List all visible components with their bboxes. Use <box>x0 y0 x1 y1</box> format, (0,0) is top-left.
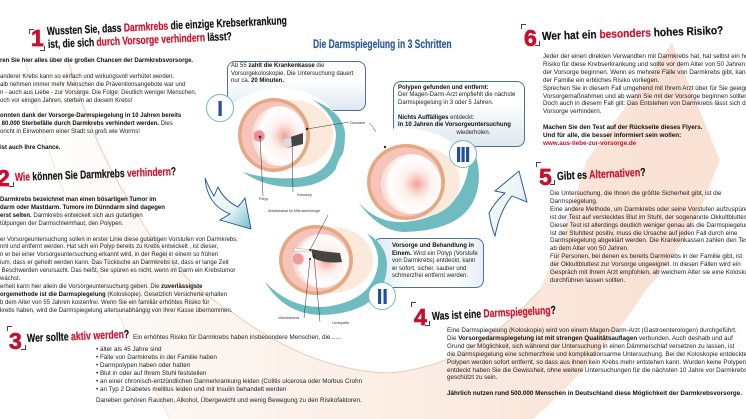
section 3 risk list: • älter als 45 Jahre sind • Fälle von Darmkrebs in der Familie haben • Darmpolypen haben oder hatten • Blut in oder auf Ihrem Stuhl feststellen • an einer chronisch-entzündlichen Darmerkrankung leiden (Colitis ulcerosa oder Morbus Crohn • an Typ 2 Diabetes mellitus leiden und mit Insulin behandelt werden Daneben gehören Rauchen, Alkohol, Übergewicht und wenig Bewegung zu den Risikofaktoren. <box>96 346 362 404</box>
illustration labels: Arbeitskanal für Mikrowerkzeuge <box>268 209 320 213</box>
center title: Die Darmspiegelung in 3 Schritten <box>313 39 452 51</box>
callout text: step I: Ab 55 zahlt die Krankenkasse die Vorsorgekoloskopie. Die Untersuchung dauert nur ca. 20 Minuten. <box>231 63 353 84</box>
heading text: Wer hat ein besonders hohes Risiko? <box>542 25 723 43</box>
section 6 heading <box>521 24 723 51</box>
number 1: 1 <box>31 25 44 51</box>
illustration labels: Dickdarm <box>350 121 365 125</box>
arrow: right blue <box>489 171 527 236</box>
section 1 heading <box>29 15 287 51</box>
illustration labels: Polyp <box>259 197 268 201</box>
number 3: 3 <box>9 328 22 354</box>
heading text: Wie können Sie Darmkrebs verhindern? <box>15 166 176 184</box>
heading text: Was ist eine Darmspiegelung? <box>432 305 556 323</box>
number 4: 4 <box>414 304 427 330</box>
section 5 heading <box>536 162 646 190</box>
heading line 1: Wussten Sie, dass Darmkrebs die einzige Krebserkrankung <box>47 15 287 38</box>
illustration labels: Koloskop <box>297 193 312 197</box>
illustration: step III <box>335 128 479 232</box>
number 5: 5 <box>539 164 552 190</box>
section 1 body: ren Sie hier alles über die großen Chancen der Darmkrebsvorsorge. anderer Krebs kann so einfach und wirkungsvoll verhütet werden. alb nehmen immer mehr Menschen die Präventionsangebote war und n - auch aus Liebe - zur Vorsorge. Die Folge: Deutlich weniger Menschen, och vor einigen Jahren, sterben an diesem Krebs! onnten dank der Vorsorge-Darmspiegelung in 10 Jahren bereits 80.000 Sterbefälle durch Darmkrebs verhindert werden. Dies oricht in Einwohnern einer Stadt so groß wie Worms! ist auch Ihre Chance. <box>0 58 196 151</box>
illustration labels: Videokamera <box>278 316 299 320</box>
section 3 intro: Ein erhöhtes Risiko für Darmkrebs haben insbesondere Menschen, die...... <box>133 334 341 341</box>
illustration labels <box>259 121 365 325</box>
callout text: step II: Vorsorge und Behandlung in Einem. Wird ein Polyp (Vorstufe von Darmkrebs) entdeckt, kann er sofort, sicher, sauber und schmerzfrei entfernt werden. <box>392 243 478 279</box>
heading text: Gibt es Alternativen? <box>557 167 646 183</box>
section 3 heading <box>7 326 129 354</box>
arrow: left blue <box>205 178 251 229</box>
callout text: step III: Polypen gefunden und entfernt: Der Magen-Darm-Arzt empfiehlt die nächste Darmspiegelung in 3 oder 5 Jahren. Nichts Auffälliges entdeckt: In 10 Jahren die Vorsorgeuntersuchung wiederholen. <box>398 84 515 136</box>
number 6: 6 <box>524 25 537 51</box>
section 4 body: Eine Darmspiegelung (Koloskopie) wird von einem Magen-Darm-Arzt (Gastroenterologen) durchgeführt. Die Vorsorgedarmspiegelung ist mit strengen Qualitätsauflagen verbunden. Auch deshalb und auf Grund der Möglichkeit, sich während der Untersuchung in einen Dämmerschlaf versetzen zu lassen, ist die Darmspiegelung eine schmerzfreie und komplikationsarme Untersuchung. Bei der Koloskopie entdeckte Polypen werden sofort entfernt, so dass aus ihnen kein Krebs mehr entstehen kann. Wurden keine Polypen entdeckt haben Sie die Gewissheit, ohne weitere Untersuchungen für die nächsten 10 Jahre vor Darmkrebs geschützt zu sein. Jährlich nutzen rund 500.000 Menschen in Deutschland diese Möglichkeit der Darmkrebsvorsorge. <box>447 327 746 397</box>
callout box: step III <box>393 81 525 147</box>
heading text: Wer sollte aktiv werden? <box>27 329 129 345</box>
callout box: step I <box>227 61 366 111</box>
illustration: step II <box>252 210 387 322</box>
callout box: step II <box>373 238 484 288</box>
section 4 heading <box>411 302 556 330</box>
section 2 heading <box>0 165 176 191</box>
illustration labels: Lichtquelle <box>332 321 349 325</box>
heading line 2: ist, die sich durch Vorsorge verhindern lässt? <box>48 30 232 50</box>
badges: I, II, III <box>206 94 476 310</box>
section 2 body: Darmkrebs bezeichnet man einen bösartigen Tumor im darm oder Mastdarm. Tumore im Dünndarm sind dagegen erst selten. Darmkrebs entwickelt sich aus gutartigen tülpungen der Darmschleimhaut, den Polypen. er Vorsorgeuntersuchung sollen in erster Linie diese gutartigen Vorstufen von Darmkrebs, nnt und entfernt werden. Hat sich ein Polyp bereits zu Krebs entwickelt , ist dieser, n er bei einer Vorsorgeuntersuchung erkannt wird, in der Regel in einem so frühen ium, dass er geheilt werden kann. Das Tückische an Darmkrebs ist, dass er lange Zeit Beschwerden verursacht. Das heißt, Sie spüren es nicht, wenn im Darm ein Krebstumor wächst. erheit kann hier allein die Vorsorgeuntersuchung geben. Die zuverlässigste orgemethode ist die Darmspiegelung (Koloskopie). Gesetzlich Versicherte erhalten b dem Alter von 55 Jahren kostenfrei. Wenn Sie ein familiär erhöhtes Risiko für krebs haben, wird die Darmspiegelung altersunabhängig von Ihrer Kasse übernommen. <box>0 197 238 314</box>
